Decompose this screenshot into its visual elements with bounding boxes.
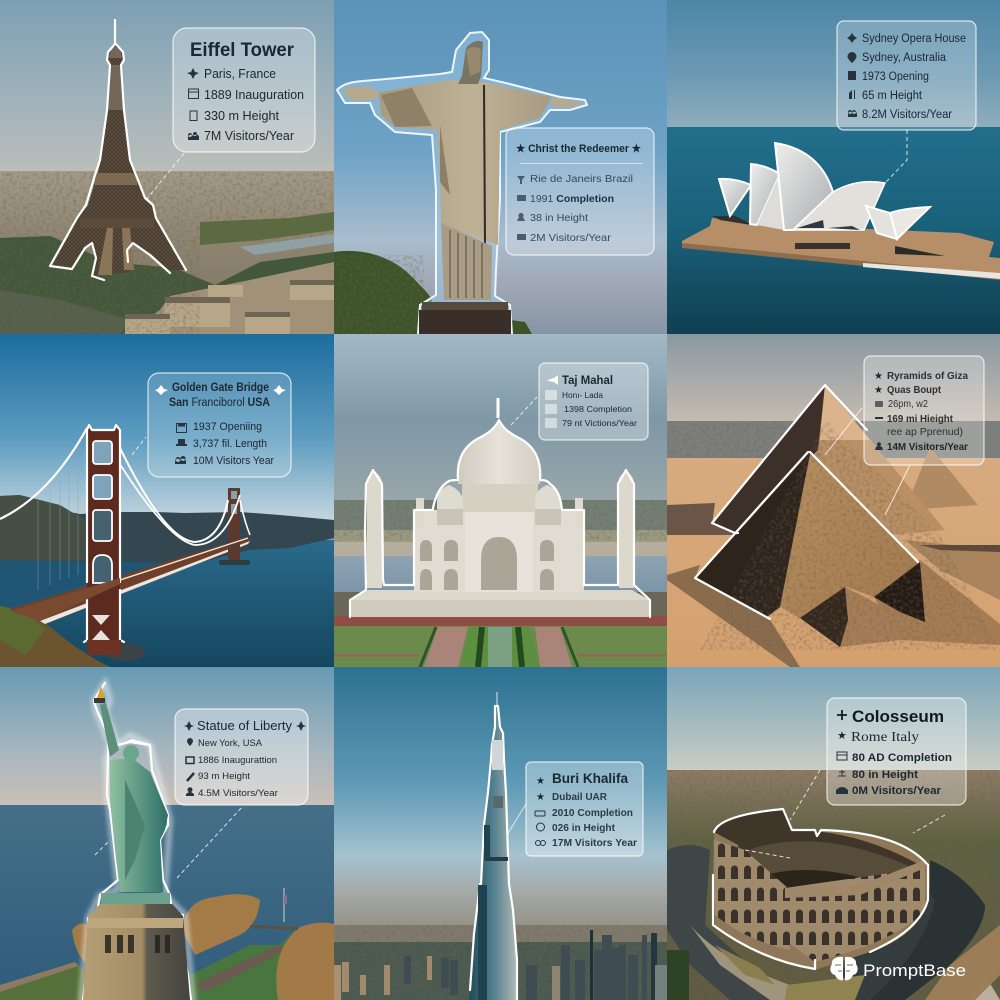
callout: Christ the Redeemer facts: 2M Visitors/Year [530, 232, 612, 244]
callout: Eiffel Tower facts: 1889 Inauguration [204, 88, 304, 102]
callout: Sydney Opera House facts: 8.2M Visitors/Year [862, 109, 952, 121]
callout: Pyramids of Giza facts: 169 mi Hieight [887, 413, 953, 425]
logo: PromptBase [830, 957, 966, 980]
icon: Opera House building [682, 143, 1000, 280]
callout: Statue of Liberty facts [175, 709, 308, 805]
icon: Burj Khalifa tower [469, 692, 517, 1000]
callout: Golden Gate Bridge facts: 1937 Openiing [193, 421, 262, 433]
panel: Golden Gate Bridge [0, 334, 334, 667]
callout: Eiffel Tower facts [173, 28, 315, 152]
callout: Colosseum facts: Rome Italy [851, 730, 919, 745]
callout: Statue of Liberty facts: Statue of Liberty [197, 718, 292, 733]
callout: Golden Gate Bridge facts: 3,737 fil. Length [193, 438, 267, 450]
callout: Sydney Opera House facts: Sydney Opera House [862, 33, 966, 45]
callout: Golden Gate Bridge facts: San Franciborol USA [169, 397, 270, 409]
panel: Statue of Liberty [0, 667, 334, 1000]
callout: Sydney Opera House facts: Sydney, Australia [862, 52, 947, 64]
callout: Statue of Liberty facts: 93 m Height [198, 771, 250, 782]
callout: Burj Khalifa facts [526, 762, 643, 856]
callout: Taj Mahal facts [539, 363, 648, 440]
callout: Golden Gate Bridge facts [148, 373, 291, 477]
callout: Burj Khalifa facts: 17M Visitors Year [552, 838, 637, 849]
callout: Christ the Redeemer facts: 38 in Height [530, 212, 588, 224]
icon: pyramids [695, 385, 1000, 650]
callout: Taj Mahal facts: Honı- Lada [562, 391, 604, 400]
callout: Golden Gate Bridge facts: 10M Visitors Year [193, 455, 274, 467]
panel: Burj Khalifa [334, 667, 667, 1000]
callout: Burj Khalifa facts: ★ [536, 776, 545, 787]
callout: Statue of Liberty facts: New York, USA [198, 738, 263, 749]
callout: Pyramids of Giza facts: ree ap Pprenud) [887, 426, 963, 438]
callout: Colosseum facts: 80 in Height [852, 769, 918, 781]
callout: Pyramids of Giza facts: Ryramids of Giza [887, 370, 968, 382]
callout: Taj Mahal facts: 1398 Completion [564, 405, 632, 414]
callout: Sydney Opera House facts: 1973 Opening [862, 71, 929, 83]
callout: Taj Mahal facts: 79 nt Victions/Year [562, 419, 637, 428]
callout: Pyramids of Giza facts: 14M Visitors/Year [887, 441, 968, 453]
panel: Eiffel Tower [0, 0, 334, 334]
logo: PromptBase: PromptBase [863, 961, 966, 980]
icon: Colosseum amphitheatre [713, 809, 928, 970]
callout: Christ the Redeemer facts [506, 128, 654, 255]
callout: Burj Khalifa facts: Buri Khalifa [552, 770, 628, 786]
icon: Christ statue [337, 32, 587, 334]
callout: Burj Khalifa facts: 026 in Height [552, 823, 616, 834]
icon: Eiffel Tower structure [50, 20, 186, 280]
callout: Sydney Opera House facts [837, 21, 976, 130]
callout: Burj Khalifa facts: 2010 Completion [552, 808, 633, 819]
panel: Colosseum [667, 667, 1000, 1000]
callout: Christ the Redeemer facts: ★ Christ the Redeemer ★ [516, 143, 641, 155]
callout: Eiffel Tower facts: Eiffel Tower [190, 39, 294, 61]
callout: Pyramids of Giza facts [864, 356, 984, 465]
panel: Taj Mahal [334, 334, 667, 667]
callout: Sydney Opera House facts: 65 m Height [862, 90, 923, 102]
callout: Pyramids of Giza facts: Quas Boupt [887, 384, 941, 396]
callout: Eiffel Tower facts: 7M Visitors/Year [204, 129, 294, 143]
callout: Colosseum facts: Colosseum [852, 707, 944, 726]
panel: Christ the Redeemer [334, 0, 667, 334]
callout: Pyramids of Giza facts: ★ [874, 385, 883, 396]
callout: Burj Khalifa facts: ★ [536, 792, 545, 803]
callout: Taj Mahal facts: Taj Mahal [562, 375, 613, 387]
callout: Colosseum facts: ★ [837, 730, 847, 742]
icon: Taj Mahal building [350, 398, 650, 617]
callout: Pyramids of Giza facts: 26pm, w2 [888, 398, 928, 410]
callout: Burj Khalifa facts: Dubail UAR [552, 792, 608, 803]
callout: Pyramids of Giza facts: ★ [874, 371, 883, 382]
callout: Golden Gate Bridge facts: Golden Gate Bridge [172, 382, 269, 394]
callout: Statue of Liberty facts: 4.5M Visitors/Year [198, 788, 278, 799]
callout: Statue of Liberty facts: 1886 Inaugurattion [198, 755, 277, 766]
callout: Eiffel Tower facts: 330 m Height [204, 109, 280, 123]
callout: Colosseum facts [827, 698, 966, 805]
icon: Statue of Liberty [81, 683, 193, 1000]
callout: Christ the Redeemer facts: Rie de Janeirs Brazil [530, 173, 633, 185]
panel: Sydney Opera House [667, 0, 1000, 334]
callout: Colosseum facts: 80 AD Completion [852, 752, 952, 764]
icon: Golden Gate Bridge [0, 424, 250, 661]
callout: Christ the Redeemer facts: 1991 Completion [530, 193, 614, 205]
panel: Pyramids of Giza [667, 334, 1000, 667]
callout: Eiffel Tower facts: Paris, France [204, 67, 276, 81]
callout: Colosseum facts: 0M Visitors/Year [852, 785, 942, 797]
